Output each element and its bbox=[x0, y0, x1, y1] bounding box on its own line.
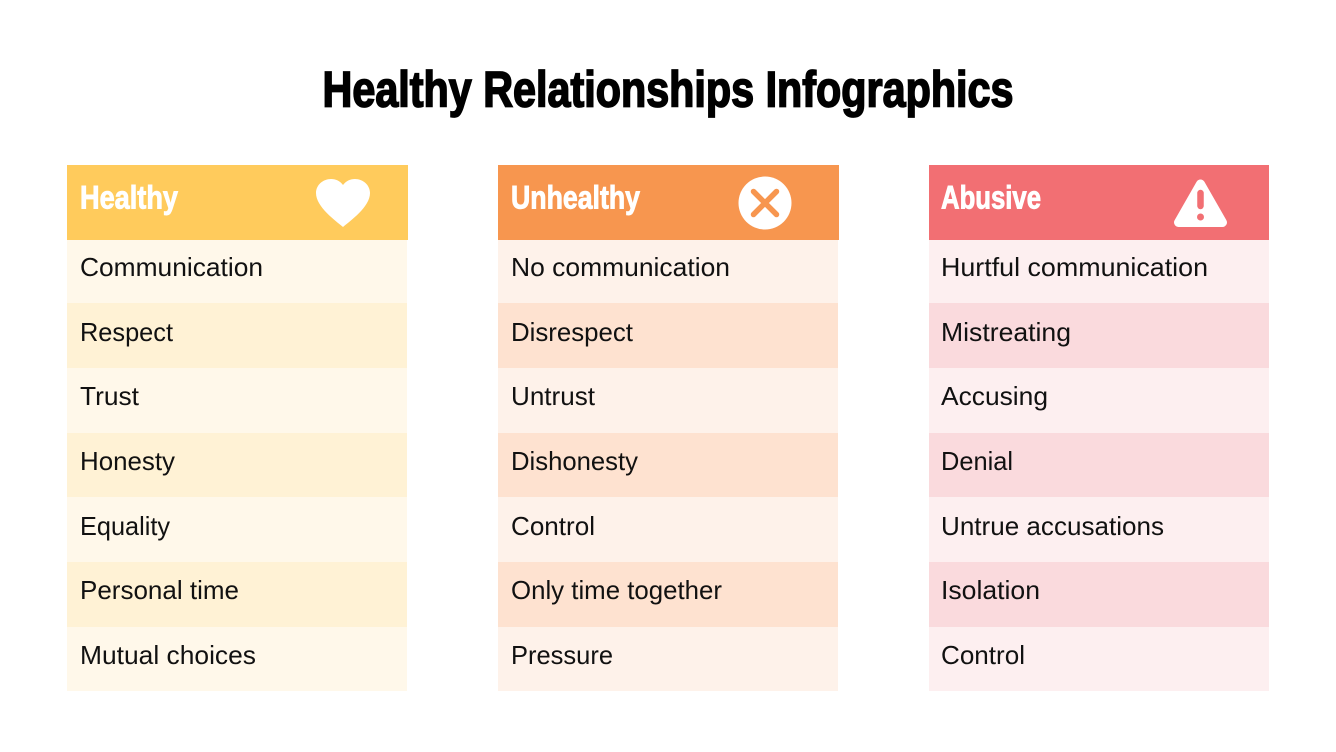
row: equality bbox=[67, 497, 407, 562]
row: equality: Equality bbox=[80, 511, 170, 541]
row: trust: Trust bbox=[80, 381, 140, 411]
row: personal time: Personal time bbox=[80, 575, 239, 605]
row: pressure bbox=[498, 627, 838, 691]
healthy header bar bbox=[67, 165, 408, 240]
panel: abusive bbox=[929, 165, 1269, 691]
row: mistreating bbox=[929, 303, 1269, 368]
row: personal time bbox=[67, 562, 407, 627]
row: untrue accusations: Untrue accusations bbox=[941, 511, 1164, 541]
row: no communication: No communication bbox=[511, 252, 730, 282]
row: denial bbox=[929, 433, 1269, 497]
row: denial: Denial bbox=[941, 446, 1013, 476]
row: pressure: Pressure bbox=[511, 640, 613, 670]
row: communication bbox=[67, 240, 407, 303]
row: isolation bbox=[929, 562, 1269, 627]
row: dishonesty: Dishonesty bbox=[511, 446, 638, 476]
row: control bbox=[929, 627, 1269, 691]
row: dishonesty bbox=[498, 433, 838, 497]
row: hurtful communication bbox=[929, 240, 1269, 303]
row: mutual choices: Mutual choices bbox=[80, 640, 256, 670]
row: no communication bbox=[498, 240, 838, 303]
row: disrespect bbox=[498, 303, 838, 368]
icon: warning triangle bbox=[1178, 184, 1222, 222]
row: control: Control bbox=[941, 640, 1025, 670]
row: communication: Communication bbox=[80, 252, 263, 282]
row: untrust bbox=[498, 368, 838, 433]
row: accusing: Accusing bbox=[941, 381, 1048, 411]
unhealthy heading: Unhealthy bbox=[511, 180, 640, 216]
panel: healthy bbox=[67, 165, 408, 691]
row: respect bbox=[67, 303, 407, 368]
row: only time together bbox=[498, 562, 838, 627]
panel: unhealthy bbox=[498, 165, 839, 691]
icon: heart bbox=[316, 179, 370, 227]
row: control bbox=[498, 497, 838, 562]
row: hurtful communication: Hurtful communication bbox=[941, 252, 1208, 282]
row: disrespect: Disrespect bbox=[511, 317, 634, 347]
icon: cross in circle bbox=[738, 176, 792, 230]
healthy heading: Healthy bbox=[80, 180, 178, 216]
row: control: Control bbox=[511, 511, 595, 541]
row: mutual choices bbox=[67, 627, 407, 691]
title: Healthy Relationships Infographics bbox=[322, 62, 1014, 118]
row: isolation: Isolation bbox=[941, 575, 1040, 605]
abusive header bar bbox=[929, 165, 1269, 240]
row: only time together: Only time together bbox=[511, 575, 722, 605]
row: honesty bbox=[67, 433, 407, 497]
unhealthy header bar bbox=[498, 165, 839, 240]
row: mistreating: Mistreating bbox=[941, 317, 1071, 347]
row: accusing bbox=[929, 368, 1269, 433]
row: trust bbox=[67, 368, 407, 433]
row: honesty: Honesty bbox=[80, 446, 175, 476]
row: untrue accusations bbox=[929, 497, 1269, 562]
row: untrust: Untrust bbox=[511, 381, 596, 411]
row: respect: Respect bbox=[80, 317, 174, 347]
abusive heading: Abusive bbox=[941, 180, 1041, 216]
